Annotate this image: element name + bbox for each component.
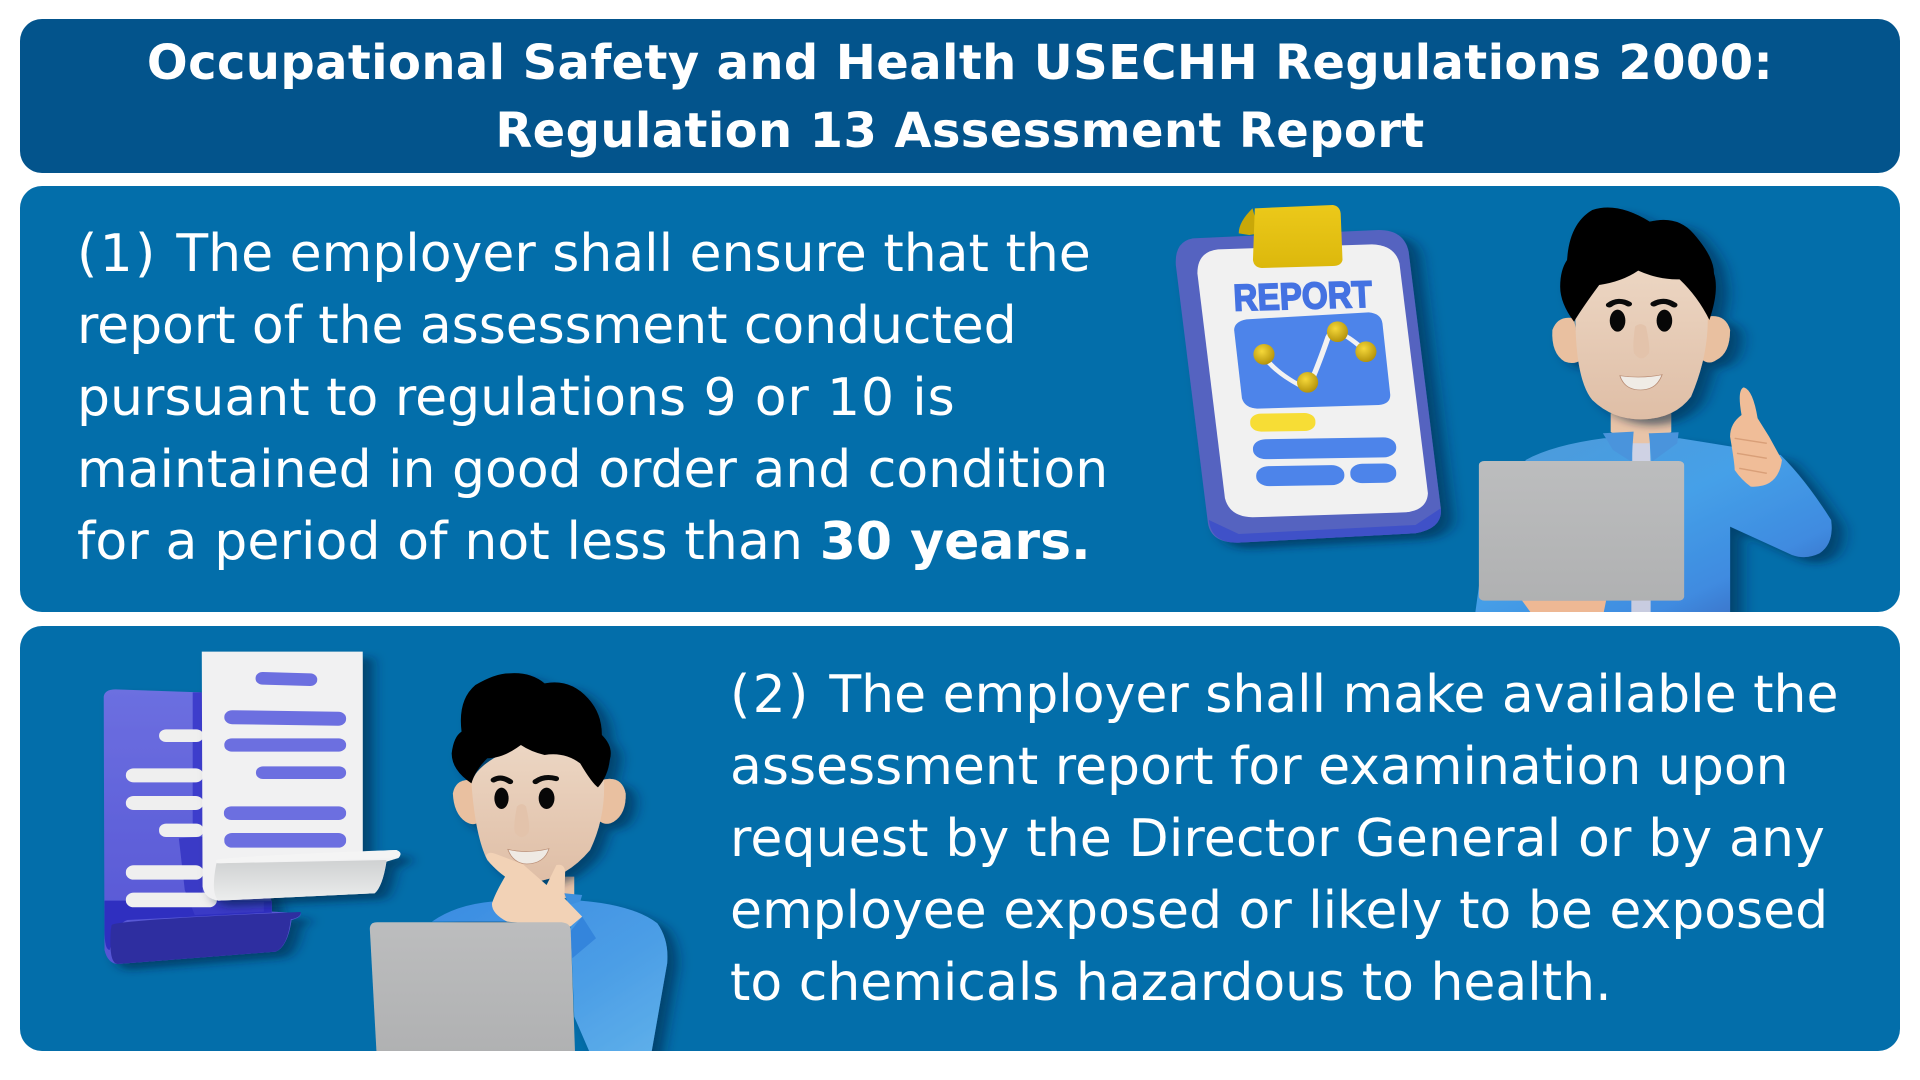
man shirt [1475,438,1832,613]
text block: clause 1: for a period of not less than 30 years. [77,512,1091,572]
man hand [1730,387,1782,487]
icon: document scroll back sheet [104,689,301,964]
text block: clause 1: (1) The employer shall ensure that the [77,224,1091,284]
figure: man with laptop, thumbs up [1475,208,1832,613]
icon: report clipboard [1176,205,1441,543]
text block: clause 1: maintained in good order and condition [77,440,1108,500]
figure: thinking man with laptop [370,673,667,1053]
text block: clause 1: pursuant to regulations 9 or 10 is [77,368,956,428]
man head [1552,208,1730,419]
title text: Regulation 13 Assessment Report [495,103,1425,159]
man shirt [432,901,667,1053]
text block: clause 1 [77,224,1108,572]
illustrations: clause 2 [104,652,667,1053]
illustrations: clause 1 [1176,205,1832,613]
report chart [1234,312,1390,409]
laptop [370,922,575,1053]
title text: Occupational Safety and Health USECHH Regulations 2000: [147,35,1773,91]
text block: clause 2 [730,665,1838,1013]
report label: REPORT [1232,273,1373,319]
man head [452,673,626,882]
text block: clause 2: to chemicals hazardous to health. [730,953,1612,1013]
man hand [486,853,582,927]
icon: document scroll front sheet [202,652,400,901]
panel: clause 1 [20,186,1900,612]
text block: clause 2: request by the Director General or by any [730,809,1825,869]
title text [147,35,1773,159]
laptop [1479,461,1684,601]
text block: clause 2: employee exposed or likely to be exposed [730,881,1828,941]
title banner [20,19,1900,173]
text block: clause 2: assessment report for examination upon [730,737,1789,797]
text block: clause 1: report of the assessment conducted [77,296,1017,356]
text block: clause 2: (2) The employer shall make available the [730,665,1838,725]
panel: clause 2 [20,626,1900,1051]
